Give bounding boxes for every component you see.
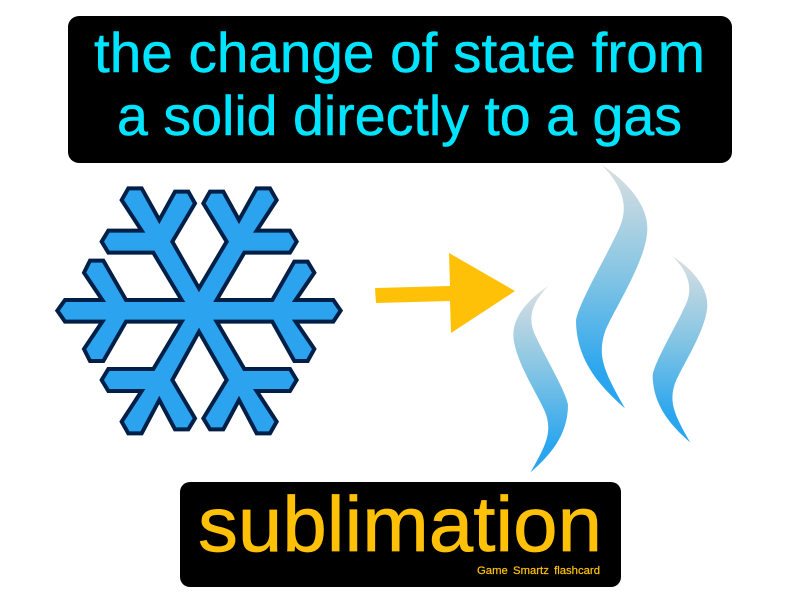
term title: sublimation bbox=[198, 480, 602, 568]
icon: gas wisps bbox=[513, 165, 707, 472]
left wisp bbox=[513, 286, 568, 472]
center wisp bbox=[576, 165, 647, 408]
icon: snowflake bbox=[57, 188, 341, 433]
panel: term bbox=[180, 480, 621, 587]
panel: definition bbox=[68, 16, 732, 163]
right wisp bbox=[653, 256, 707, 442]
definition text bbox=[94, 21, 705, 147]
definition text: a solid directly to a gas bbox=[117, 84, 682, 147]
definition text: the change of state from bbox=[94, 21, 705, 84]
arrow bbox=[375, 253, 515, 333]
credit text: Game Smartz flashcard bbox=[477, 565, 600, 577]
